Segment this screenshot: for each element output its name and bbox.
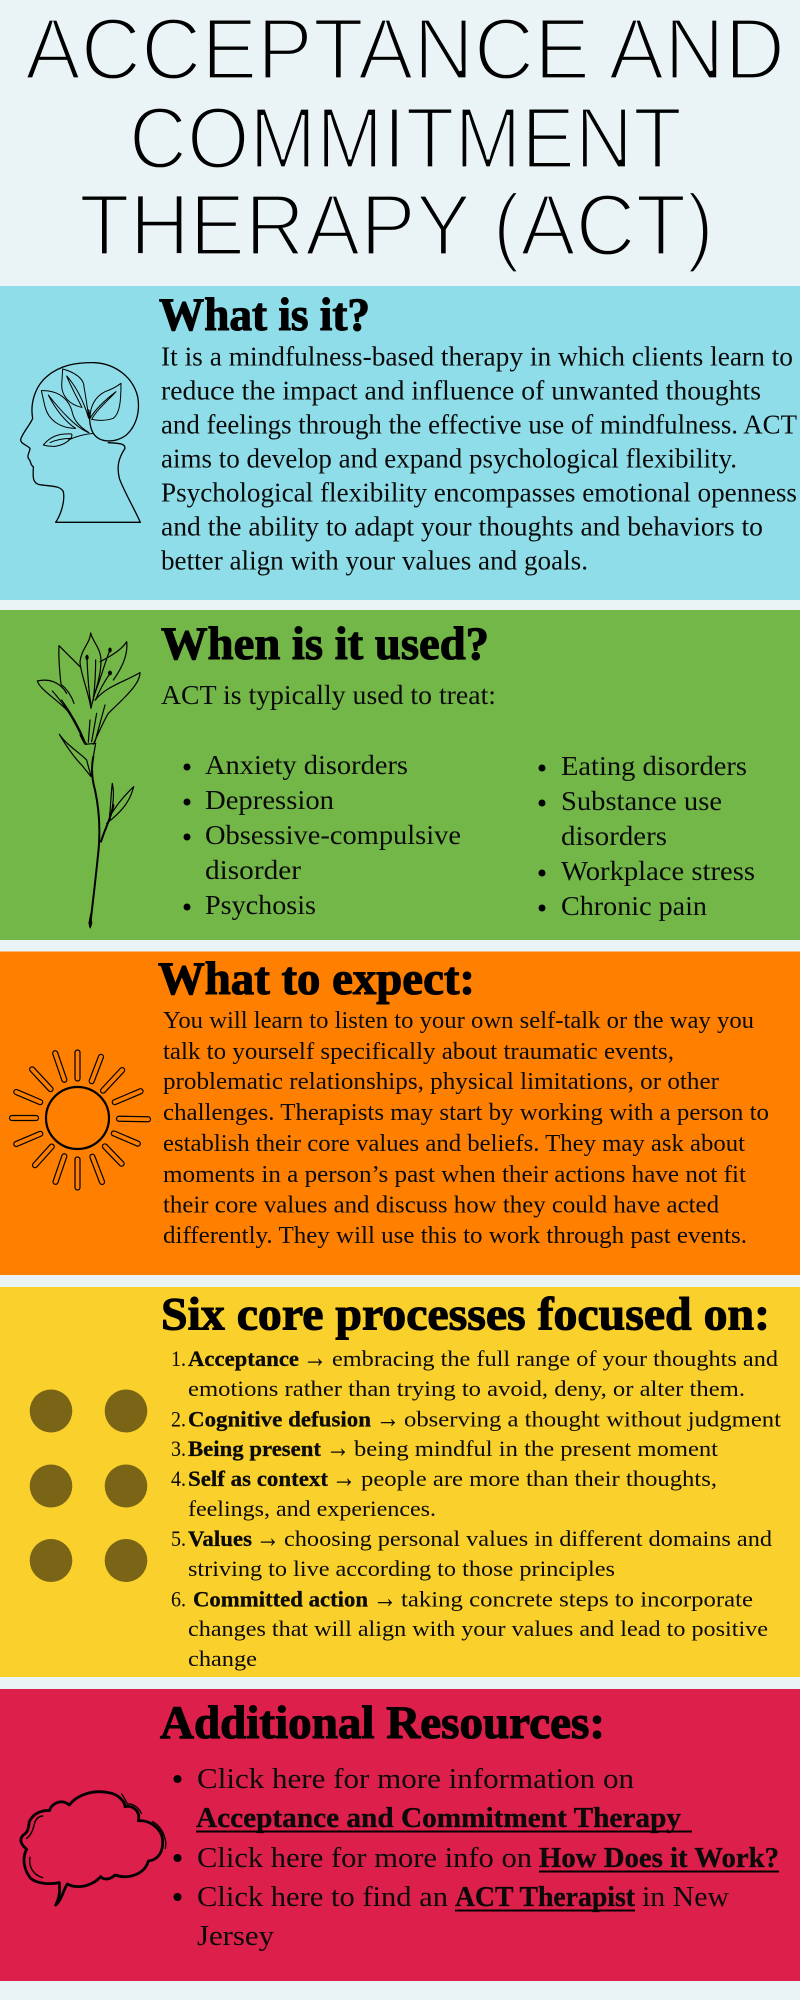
title: COMMITMENT [129,90,682,187]
icon: sun [10,1050,151,1190]
text block: what is it: Psychological flexibility encompasses emotional openness [161,478,797,508]
text block: what to expect: problematic relationships, physical limitations, or other [163,1069,719,1095]
list: resource links: How Does it Work? [539,1843,779,1874]
numbered list: processes: 1. [171,1346,186,1371]
numbered list: processes: 5. [171,1526,186,1551]
text block: what is it: reduce the impact and influence of unwanted thoughts [161,376,761,406]
list: resource links: Click here to find an [197,1882,448,1913]
numbered list: processes: → [373,1582,397,1614]
list: resource links: in New [642,1882,729,1913]
numbered list: processes [171,1341,782,1671]
icon: six dots [30,1390,147,1582]
text block: what is it: aims to develop and expand psychological flexibility. [161,444,737,474]
text block: what is it: and the ability to adapt your thoughts and behaviors to [161,512,763,542]
list: left column [184,750,461,920]
text block: what to expect: challenges. Therapists may start by working with a person to [163,1100,769,1126]
list: right column: Substance use [561,786,722,816]
list: resource links [174,1764,779,1952]
text: intro line: ACT is typically used to treat: [161,680,496,710]
list: left column: Psychosis [205,890,316,920]
numbered list: processes: changes that will align with your values and lead to positive [188,1616,768,1641]
text block: what to expect: establish their core values and beliefs. They may ask about [163,1131,745,1157]
text block: what to expect: differently. They will use this to work through past events. [163,1223,747,1249]
numbered list: processes: 2. [171,1406,186,1432]
text block: what to expect: talk to yourself specifically about traumatic events, [163,1039,674,1065]
list: right column: disorders [561,821,667,851]
list: left column: Anxiety disorders [205,750,408,780]
numbered list: processes: choosing personal values in different domains and [284,1526,772,1551]
text block: what is it: It is a mindfulness-based therapy in which clients learn to [161,342,793,372]
numbered list: processes: feelings, and experiences. [188,1496,436,1521]
panel: when is it used [0,610,800,940]
numbered list: processes: embracing the full range of your thoughts and [332,1346,778,1371]
numbered list: processes: taking concrete steps to incorporate [401,1586,753,1612]
icon: head with leaves [21,363,140,522]
numbered list: processes: → [303,1341,327,1374]
numbered list: processes: Self as context [188,1466,329,1491]
text block: what to expect: You will learn to listen to your own self-talk or the way you [163,1008,754,1034]
numbered list: processes: Acceptance [188,1346,299,1371]
numbered list: processes: → [332,1461,356,1494]
list: right column: Chronic pain [561,891,708,921]
numbered list: processes: Cognitive defusion [188,1406,371,1432]
list: resource links: Click here for more info on [197,1843,532,1874]
title [25,1,785,274]
list: right column: Eating disorders [561,751,747,781]
list: left column: Obsessive-compulsive [205,820,461,850]
numbered list: processes: → [256,1521,280,1554]
list: left column: Depression [205,785,335,815]
text block: what is it: and feelings through the effective use of mindfulness. ACT [161,410,797,440]
numbered list: processes: → [326,1431,350,1464]
heading: what is it: What is it? [159,289,370,341]
numbered list: processes: emotions rather than trying to avoid, deny, or alter them. [188,1376,745,1401]
heading: what to expect: What to expect: [158,953,475,1005]
title: ACCEPTANCE AND [25,1,785,98]
icon: flower stem [37,633,140,929]
list: resource links: Jersey [197,1921,275,1952]
list: resource links: Acceptance and Commitment Therapy [196,1803,681,1834]
text block: what is it [161,342,797,576]
text block: what is it: better align with your values and goals. [161,546,588,576]
panel: additional resources [0,1689,800,1981]
heading: additional resources: Additional Resources: [160,1697,605,1749]
numbered list: processes: Committed action [193,1586,368,1612]
list: resource links: ACT Therapist [455,1882,635,1913]
icon: speech cloud [21,1792,166,1905]
numbered list: processes: being mindful in the present moment [354,1436,719,1461]
heading: when is it used: When is it used? [161,618,489,670]
panel: six core processes [0,1287,800,1677]
list: right column [538,751,755,921]
numbered list: processes: 4. [171,1466,186,1491]
list: resource links: Click here for more information on [197,1764,634,1795]
panel: what to expect [0,952,800,1275]
numbered list: processes: 3. [171,1436,186,1461]
title: THERAPY (ACT) [79,177,714,274]
numbered list: processes: observing a thought without judgment [404,1406,782,1432]
numbered list: processes: → [376,1402,400,1434]
text block: what to expect: moments in a person’s past when their actions have not fit [163,1162,746,1188]
list: left column: disorder [205,855,301,885]
numbered list: processes: Being present [188,1436,322,1461]
numbered list: processes: Values [188,1526,252,1551]
numbered list: processes: striving to live according to those principles [188,1556,615,1581]
list: right column: Workplace stress [561,856,755,886]
panel: what is it [0,286,800,600]
numbered list: processes: people are more than their thoughts, [361,1466,717,1491]
numbered list: processes: 6. [171,1586,186,1612]
text block: what to expect: their core values and discuss how they could have acted [163,1192,719,1218]
numbered list: processes: change [188,1646,257,1671]
text block: what to expect [163,1008,769,1249]
heading: six core processes: Six core processes focused on: [161,1288,770,1340]
